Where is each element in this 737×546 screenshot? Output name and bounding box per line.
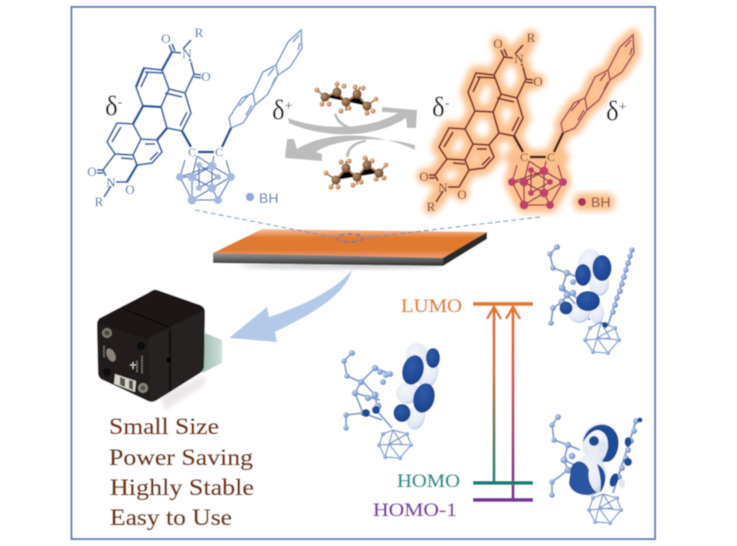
legend: blue BH	[246, 190, 278, 206]
arrows: reversible exchange	[285, 107, 417, 161]
molecule: neutral blue compound: R	[195, 25, 204, 40]
molecule: orange glowing charged compound: N	[514, 51, 524, 66]
orbital: LUMO molecule	[547, 244, 635, 355]
outer frame	[72, 7, 655, 539]
energy level diagram	[487, 307, 520, 498]
delta minus orange: -	[445, 96, 450, 111]
molecule: orange glowing charged compound: R	[427, 199, 436, 214]
molecule: orange glowing charged compound: O	[493, 36, 503, 51]
features list: Power Saving	[109, 445, 254, 470]
zoom callout dashed lines	[195, 210, 540, 242]
delta plus right: δ	[606, 96, 619, 126]
delta minus orange: δ	[432, 92, 445, 122]
molecule: neutral blue compound: C	[188, 145, 196, 159]
HOMO-1 level	[373, 498, 533, 521]
features list: Small Size	[109, 414, 219, 439]
HOMO level: HOMO	[397, 471, 460, 492]
molecule: orange glowing charged compound: O	[457, 187, 467, 202]
legend: blue BH: BH	[259, 190, 278, 206]
features list	[109, 414, 254, 530]
molecule: orange glowing charged compound: O	[533, 74, 543, 89]
transition arrows	[487, 307, 520, 498]
delta plus right: +	[619, 100, 627, 115]
molecule: neutral blue compound	[87, 25, 302, 209]
molecule: neutral blue compound: N	[106, 175, 116, 190]
features list: Highly Stable	[110, 475, 254, 500]
molecule: neutral blue compound: C	[215, 145, 223, 159]
device photo: gas sensor cube	[97, 290, 222, 410]
molecule: neutral blue compound: O	[161, 31, 171, 46]
LUMO level	[401, 296, 533, 317]
features list: Easy to Use	[110, 505, 232, 530]
molecule: orange glowing charged compound: R	[527, 30, 536, 45]
molecule: hexane vapour bottom	[323, 155, 388, 190]
legend: orange BH: BH	[591, 194, 610, 210]
delta plus left: +	[285, 99, 293, 114]
delta minus blue: δ	[105, 91, 118, 121]
molecule: neutral blue compound: O	[125, 182, 135, 197]
molecule: orange glowing charged compound: C	[547, 150, 555, 164]
molecule: orange glowing charged compound: O	[419, 169, 429, 184]
big blue curved arrow to device	[229, 270, 352, 342]
HOMO-1 level: HOMO-1	[373, 500, 457, 521]
molecule: neutral blue compound: O	[201, 69, 211, 84]
molecule: neutral blue compound: O	[87, 164, 97, 179]
molecule: orange glowing charged compound: C	[520, 150, 528, 164]
whole illustration	[72, 7, 655, 539]
molecule: orange glowing charged compound	[419, 30, 634, 214]
LUMO level: LUMO	[401, 296, 462, 317]
molecule: neutral blue compound: N	[182, 46, 192, 61]
delta plus left: δ	[272, 95, 285, 125]
legend: orange BH	[573, 193, 615, 211]
orbital: HOMO-1 molecule	[549, 414, 642, 525]
HOMO level	[397, 471, 533, 492]
molecule: neutral blue compound: R	[95, 194, 104, 209]
sensor film substrate	[213, 229, 487, 269]
delta minus blue: -	[118, 95, 123, 110]
orbital: HOMO molecule	[341, 343, 442, 460]
molecule: hexane vapour top	[314, 81, 378, 116]
molecule: orange glowing charged compound: N	[438, 180, 448, 195]
